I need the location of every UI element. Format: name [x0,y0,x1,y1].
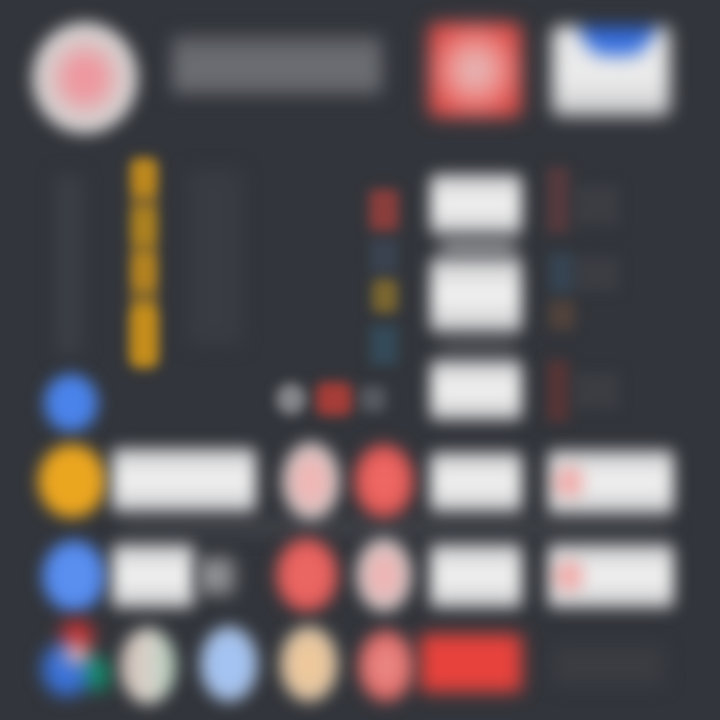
red circle row 2 [276,538,338,612]
pale green circle [120,628,176,704]
blue circle row 2 [42,540,106,612]
dim text bottom right [552,645,664,685]
dim left column [56,175,82,355]
multicolor circle [30,608,118,708]
white card 2 [430,258,522,332]
white card center [430,174,522,234]
red circle row 1 [354,444,414,518]
blue circle [44,374,98,432]
small icon row [270,374,390,424]
mail icon [552,26,670,116]
yellow circle [38,444,106,518]
red bar [420,634,522,692]
right dim marks [542,163,612,426]
dim text labels [188,170,242,345]
grey band between cards [440,238,516,258]
white card with red mark row 1 [548,450,674,514]
pale circle row 1 [282,442,340,520]
white bar row 1 [112,448,256,512]
white bar row 2 [112,544,194,608]
red app icon [428,22,522,118]
white card row 2 [430,544,522,608]
white card row 1 [430,452,522,512]
yellow step column [120,149,168,377]
logo circle [32,22,138,134]
pale blue circle [200,626,258,702]
red circle row 3 [358,630,414,702]
row band shading [120,520,670,534]
pale circle row 2 [356,538,412,612]
grey band between lower cards [440,338,516,354]
white card 3 [430,360,522,420]
white card with red mark row 2 [548,544,674,608]
title text block [172,36,382,94]
pale tan circle [280,626,338,702]
middle small squares [362,182,406,368]
dim label row 2 [198,558,234,594]
